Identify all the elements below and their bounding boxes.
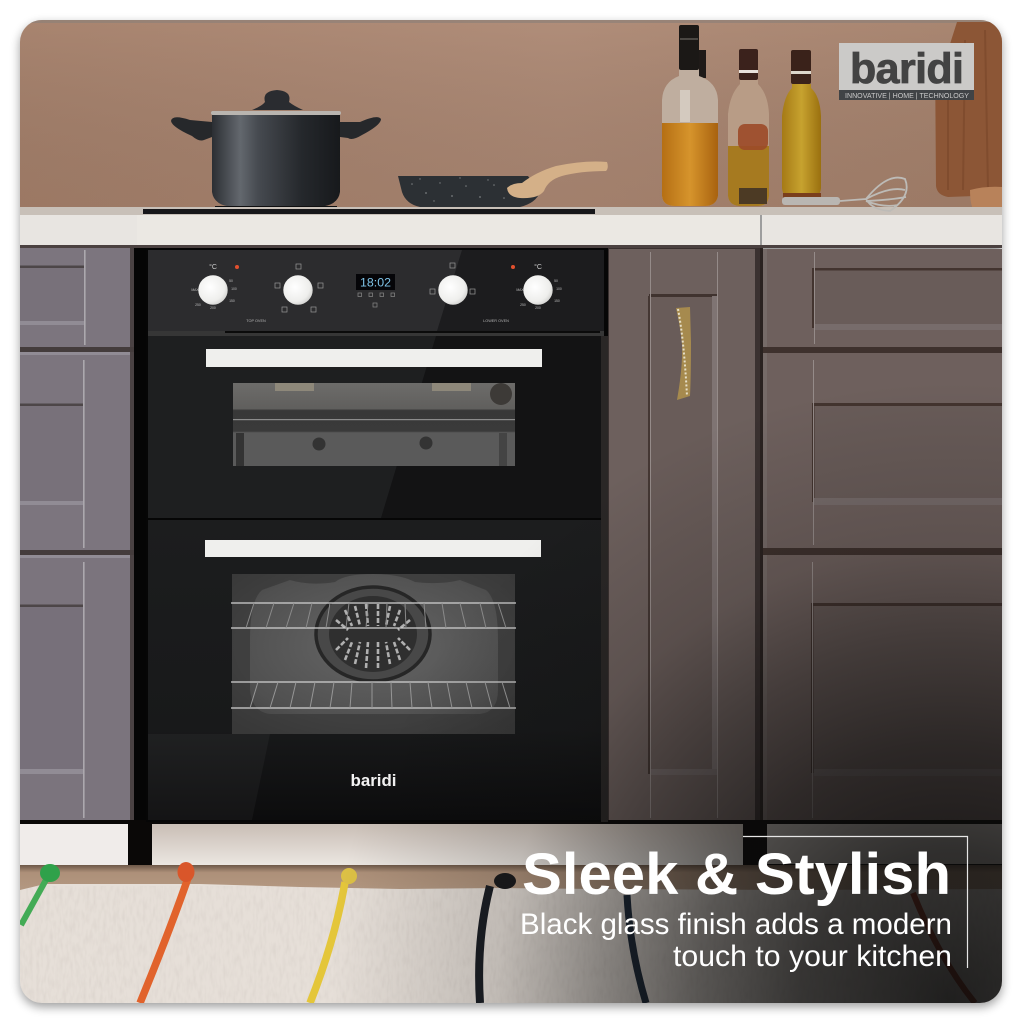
temperature knob right: MAX (516, 288, 524, 292)
cutting board (935, 22, 1002, 211)
temperature knob left (191, 263, 237, 310)
bottle 3 (782, 50, 821, 199)
digital clock display: 18:02 (360, 276, 391, 290)
oven labels (246, 319, 509, 323)
red stripe (913, 893, 975, 1003)
black tassel (479, 886, 490, 1003)
temperature knob left: 150 (229, 299, 235, 303)
navy stripe (627, 895, 646, 1003)
right cabinets (760, 248, 1002, 822)
temperature knob left: 200 (210, 306, 216, 310)
function knob right (430, 263, 475, 305)
top oven door (148, 336, 601, 518)
temperature knob right: 250 (520, 303, 526, 307)
temperature knob right (516, 263, 562, 310)
temperature knob right: °C (534, 263, 542, 271)
callout frame (743, 836, 968, 968)
function knob left (275, 264, 323, 312)
right drawer 3 (762, 555, 1002, 820)
orange tassel (140, 878, 188, 1003)
temperature knob right: 200 (535, 306, 541, 310)
green tassel (21, 878, 47, 925)
control panel (148, 250, 604, 336)
oven labels: TOP OVEN (246, 319, 266, 323)
digital clock display (356, 274, 395, 307)
temperature knob left: 50 (229, 279, 233, 283)
temperature knob left: MAX (191, 288, 199, 292)
left drawer 3 (20, 555, 134, 821)
door handle (676, 307, 691, 400)
double oven (146, 248, 608, 822)
title: Sleek & Stylish (522, 842, 951, 907)
frying pan (398, 162, 608, 207)
temperature knob right: 150 (554, 299, 560, 303)
left drawer 1 (20, 248, 134, 348)
striped rug (20, 862, 1002, 1003)
floor and plinths (20, 820, 1002, 895)
upper oven rack (231, 603, 516, 628)
top oven handle (206, 349, 542, 367)
subtitle (520, 908, 952, 973)
temperature knob left: 100 (231, 287, 237, 291)
oven labels: LOWER OVEN (483, 319, 509, 323)
lower oven window (231, 574, 516, 734)
right drawer 1 (762, 249, 1002, 347)
bottle 2 (728, 49, 769, 206)
oven brand logo: baridi (350, 771, 396, 790)
lower oven handle (205, 540, 541, 557)
left cabinet (20, 248, 134, 824)
temperature knob right: 50 (554, 279, 558, 283)
warning lights (235, 265, 515, 269)
temperature knob left: 250 (195, 303, 201, 307)
left drawer 2 (20, 352, 134, 550)
centre cabinet door (605, 248, 762, 821)
bottle 1 (662, 25, 718, 206)
lower oven door (148, 520, 601, 820)
convection fan (316, 587, 430, 681)
temperature knob right: 100 (556, 287, 562, 291)
yellow tassel (310, 882, 345, 1003)
brand logo: baridi (850, 45, 964, 93)
right drawer 2 (762, 353, 1002, 548)
oil bottles (662, 25, 821, 206)
centre plinth (152, 824, 743, 865)
right plinth (767, 824, 1002, 864)
lower oven rack (231, 682, 516, 708)
temperature knob left: °C (209, 263, 217, 271)
subtitle: Black glass finish adds a modern (520, 908, 952, 941)
cooking pot (171, 90, 381, 210)
kitchen wall (20, 20, 1002, 215)
top oven window (233, 383, 515, 466)
counter top (20, 207, 1002, 248)
left plinth (20, 824, 128, 865)
whisk (782, 178, 907, 211)
subtitle: touch to your kitchen (673, 940, 952, 973)
brand logo: INNOVATIVE | HOME | TECHNOLOGY (845, 93, 969, 100)
dark recess behind oven (134, 248, 146, 820)
